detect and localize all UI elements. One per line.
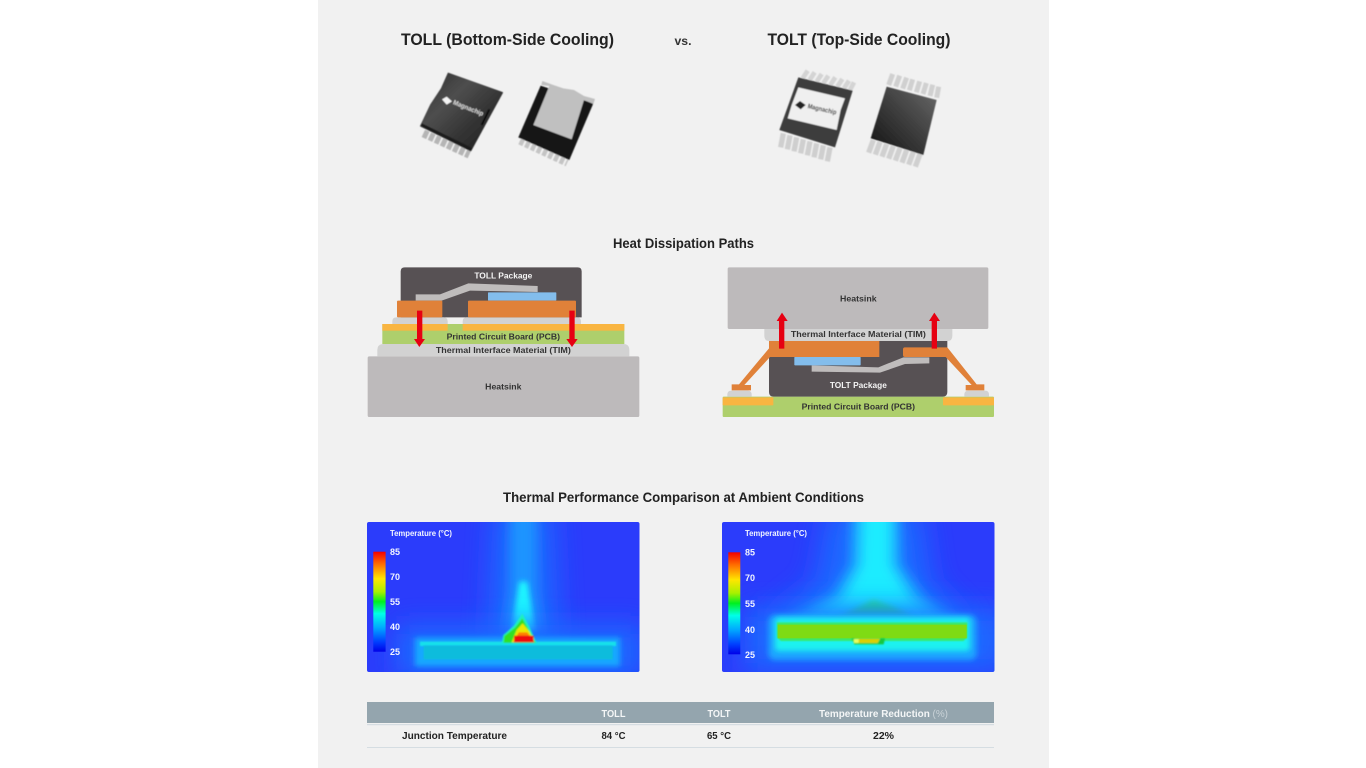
hot spot [502, 614, 537, 643]
table row: 65 °C [707, 730, 731, 742]
color scale: TOLT: 85 [745, 548, 755, 558]
color scale: TOLT: 70 [745, 573, 755, 583]
heat plume [776, 522, 963, 616]
photo: TOLL package top view: Magnachip [452, 99, 484, 118]
color scale: TOLL: 70 [390, 572, 400, 582]
thermal interface material [377, 344, 629, 356]
copper leadframe [732, 341, 984, 390]
diagram: TOLL heat path [368, 267, 639, 417]
heading: heat dissipation paths: Heat Dissipation Paths [613, 235, 754, 251]
thermal interface material [764, 329, 952, 341]
photo: TOLT package bottom view [869, 74, 939, 167]
solder pads [727, 391, 989, 397]
wire clip [416, 283, 538, 301]
color scale: TOLL: Temperature (°C) [390, 529, 452, 538]
TOLL package body [401, 267, 582, 317]
table row: Junction Temperature [402, 730, 507, 742]
printed circuit board: Printed Circuit Board (PCB) [447, 332, 560, 341]
thermal interface material: Thermal Interface Material (TIM) [791, 330, 926, 339]
color scale: TOLL: 55 [390, 597, 400, 607]
label: vs.: vs. [674, 34, 692, 48]
color scale: TOLT: 40 [745, 625, 755, 635]
silicon die [488, 292, 556, 301]
cold plate [777, 622, 967, 641]
arrow: heat down right [566, 311, 578, 347]
arrow: heat down left [414, 311, 425, 347]
color scale: TOLL: 40 [390, 622, 400, 632]
table header: Temperature Reduction (%) [819, 708, 948, 720]
color scale: TOLL: 85 [390, 547, 400, 557]
table row: 84 °C [602, 730, 626, 742]
color scale: TOLT: 25 [745, 650, 755, 660]
plate glow [397, 625, 643, 678]
heatsink: Heatsink [485, 382, 522, 391]
photo: TOLT package top view: Magnachip [807, 103, 837, 117]
page panel background [318, 0, 1049, 768]
cold plate [420, 642, 616, 659]
heatmap: TOLL [367, 522, 640, 672]
photo: TOLT package top view [779, 71, 854, 161]
heatsink: Heatsink [840, 294, 877, 303]
table: junction temperature [367, 702, 994, 748]
printed circuit board [382, 324, 624, 344]
hot spot [852, 638, 885, 644]
plate glow [745, 608, 1005, 672]
table row [367, 730, 994, 748]
color scale: TOLL: 25 [390, 647, 400, 657]
heatmap: TOLT [722, 522, 994, 672]
color scale: TOLT: Temperature (°C) [745, 529, 807, 538]
solder pads [392, 317, 581, 324]
wire clip [812, 357, 929, 373]
diagram: TOLT heat path [723, 267, 994, 417]
arrow: heat up right [929, 313, 940, 349]
table header: TOLL [602, 708, 626, 720]
copper leadframe [397, 301, 576, 317]
TOLL package body: TOLL Package [474, 272, 533, 281]
photo: TOLL package bottom view [518, 81, 595, 163]
color scale: TOLL [373, 529, 452, 657]
title: TOLT: TOLT (Top-Side Cooling) [768, 30, 950, 49]
TOLT package body [769, 341, 947, 397]
arrow: heat up left [777, 313, 788, 349]
table row: 22% [873, 730, 895, 742]
color scale: TOLT [728, 529, 807, 660]
silicon die [794, 357, 861, 365]
printed circuit board [723, 397, 994, 417]
heat plume [487, 508, 560, 648]
table header [367, 702, 994, 725]
table header: TOLT [708, 708, 731, 720]
color scale: TOLT: 55 [745, 599, 755, 609]
title: TOLL: TOLL (Bottom-Side Cooling) [401, 30, 614, 49]
heatsink [728, 267, 988, 329]
thermal interface material: Thermal Interface Material (TIM) [436, 346, 571, 355]
TOLT package body: TOLT Package [830, 381, 887, 390]
heading: thermal performance comparison: Thermal Performance Comparison at Ambient Conditions [503, 489, 864, 505]
photo: TOLL package top view [421, 73, 502, 155]
printed circuit board: Printed Circuit Board (PCB) [802, 403, 915, 412]
heatsink [368, 356, 639, 417]
